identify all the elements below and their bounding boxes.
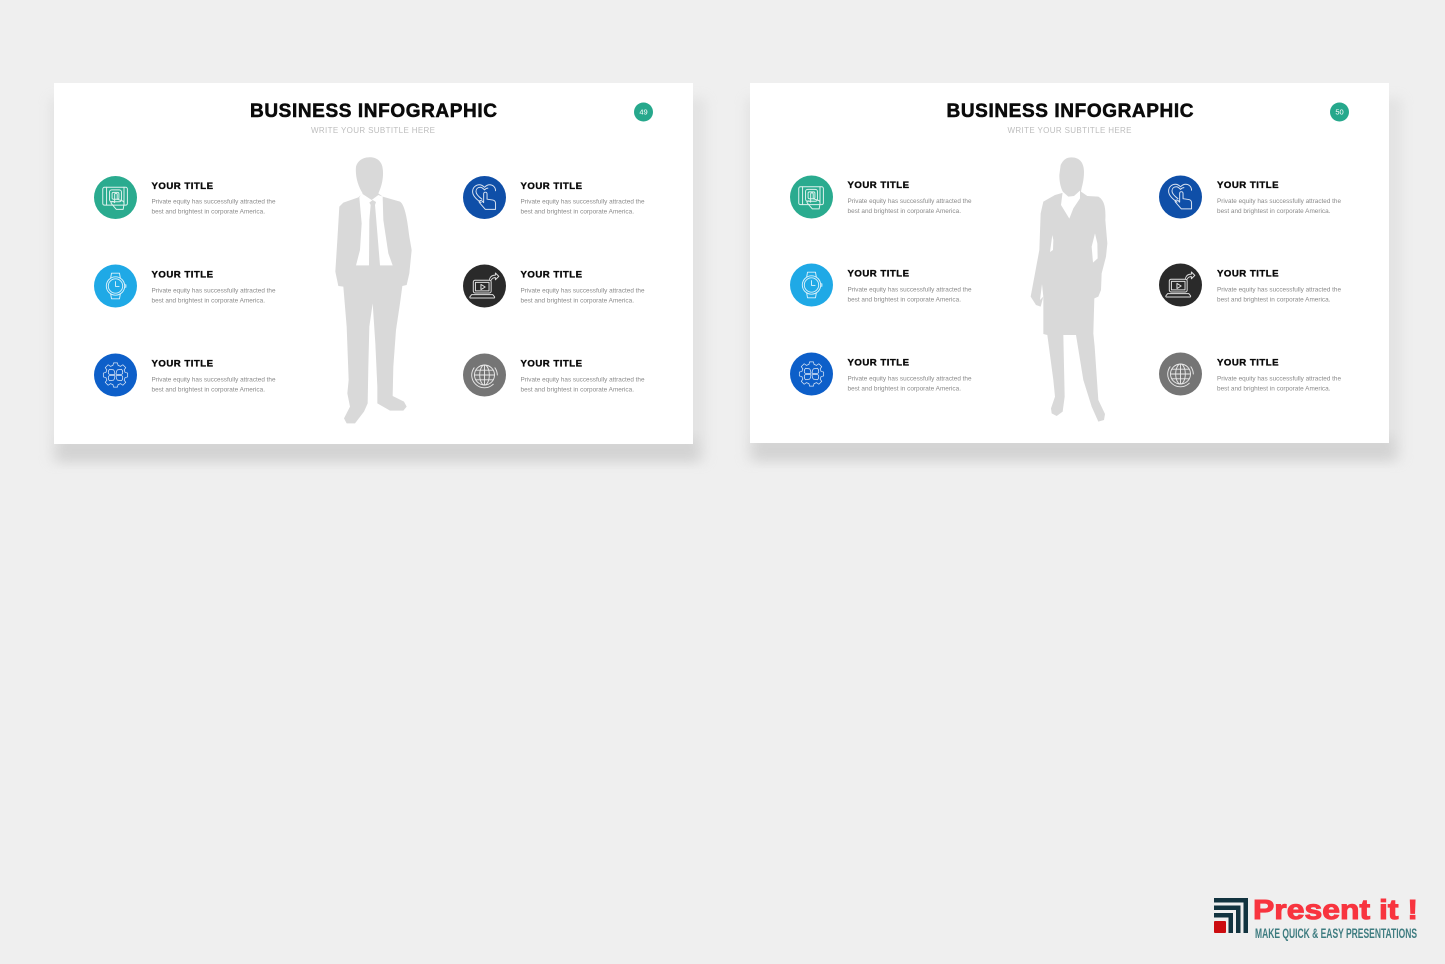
item: black laptop: Private equity has successfully attracted the — [520, 288, 645, 294]
item: navy touch heart: best and brightest in corporate America. — [1217, 208, 1331, 215]
logo: Present it — [1214, 894, 1418, 941]
item: black laptop: YOUR TITLE — [520, 269, 583, 280]
item: navy touch heart: Private equity has successfully attracted the — [520, 199, 645, 206]
item: cyan watch — [790, 264, 972, 306]
item: black laptop: best and brightest in corporate America. — [520, 298, 634, 304]
item: blue gear — [790, 352, 972, 396]
item: cyan watch: YOUR TITLE — [848, 268, 910, 279]
item: navy touch heart: Private equity has successfully attracted the — [1217, 198, 1341, 205]
logo wordmark: Present it ! — [1253, 894, 1418, 925]
item: grey globe: Private equity has successfully attracted the — [1217, 376, 1341, 382]
item: navy touch heart — [1159, 176, 1341, 218]
item: blue gear: best and brightest in corporate America. — [152, 386, 265, 394]
item: teal tablet: Private equity has successfully attracted the — [848, 198, 972, 205]
item: black laptop: Private equity has successfully attracted the — [1217, 286, 1341, 294]
card shadow: slide 50 — [746, 98, 1402, 461]
item: grey globe — [1159, 352, 1341, 396]
item: black laptop: YOUR TITLE — [1217, 268, 1279, 279]
item: blue gear: YOUR TITLE — [848, 357, 910, 368]
item: grey globe — [463, 354, 645, 396]
item: grey globe: YOUR TITLE — [1217, 357, 1279, 368]
item: teal tablet: best and brightest in corporate America. — [152, 209, 265, 216]
card shadow: slide 49 — [50, 98, 706, 462]
item: cyan watch: best and brightest in corporate America. — [848, 296, 961, 304]
item: black laptop — [463, 264, 645, 308]
subtitle: WRITE YOUR SUBTITLE HERE — [1008, 126, 1132, 135]
logo mark — [1214, 898, 1248, 933]
item: grey globe: Private equity has successfully attracted the — [520, 376, 645, 384]
panel: slide 50 — [750, 83, 1389, 443]
item: teal tablet: YOUR TITLE — [152, 181, 214, 192]
item: black laptop: best and brightest in corporate America. — [1217, 296, 1331, 304]
item: blue gear — [94, 354, 276, 396]
page number badge: 49 — [639, 108, 648, 117]
item: blue gear: YOUR TITLE — [152, 358, 214, 369]
item: teal tablet — [790, 176, 972, 218]
page number badge: 50 — [1335, 108, 1344, 117]
item: teal tablet: YOUR TITLE — [848, 180, 910, 191]
item: teal tablet — [94, 176, 276, 219]
item: navy touch heart: YOUR TITLE — [520, 181, 583, 192]
item: teal tablet: Private equity has successfully attracted the — [152, 199, 276, 206]
item: blue gear: Private equity has successfully attracted the — [152, 376, 276, 384]
silhouette: woman — [1031, 157, 1107, 422]
item: navy touch heart: best and brightest in corporate America. — [520, 209, 634, 216]
item: grey globe: YOUR TITLE — [520, 358, 583, 369]
panel: slide 49 — [54, 83, 693, 444]
item: blue gear: Private equity has successfully attracted the — [848, 376, 972, 382]
item: cyan watch: best and brightest in corporate America. — [152, 298, 265, 304]
silhouette: man — [335, 157, 412, 423]
item: cyan watch: YOUR TITLE — [152, 269, 214, 280]
title: BUSINESS INFOGRAPHIC — [946, 101, 1194, 122]
item: cyan watch: Private equity has successfully attracted the — [152, 288, 276, 294]
title: BUSINESS INFOGRAPHIC — [250, 101, 497, 122]
item: cyan watch — [94, 264, 276, 308]
item: navy touch heart: YOUR TITLE — [1217, 180, 1279, 191]
page number badge — [634, 102, 653, 122]
item: blue gear: best and brightest in corporate America. — [848, 386, 961, 392]
item: grey globe: best and brightest in corporate America. — [520, 386, 634, 394]
item: black laptop — [1159, 264, 1341, 306]
item: navy touch heart — [463, 176, 645, 219]
subtitle: WRITE YOUR SUBTITLE HERE — [311, 126, 435, 135]
item: teal tablet: best and brightest in corporate America. — [848, 208, 961, 215]
page number badge — [1330, 102, 1349, 122]
item: cyan watch: Private equity has successfully attracted the — [848, 286, 972, 294]
item: grey globe: best and brightest in corporate America. — [1217, 386, 1331, 392]
